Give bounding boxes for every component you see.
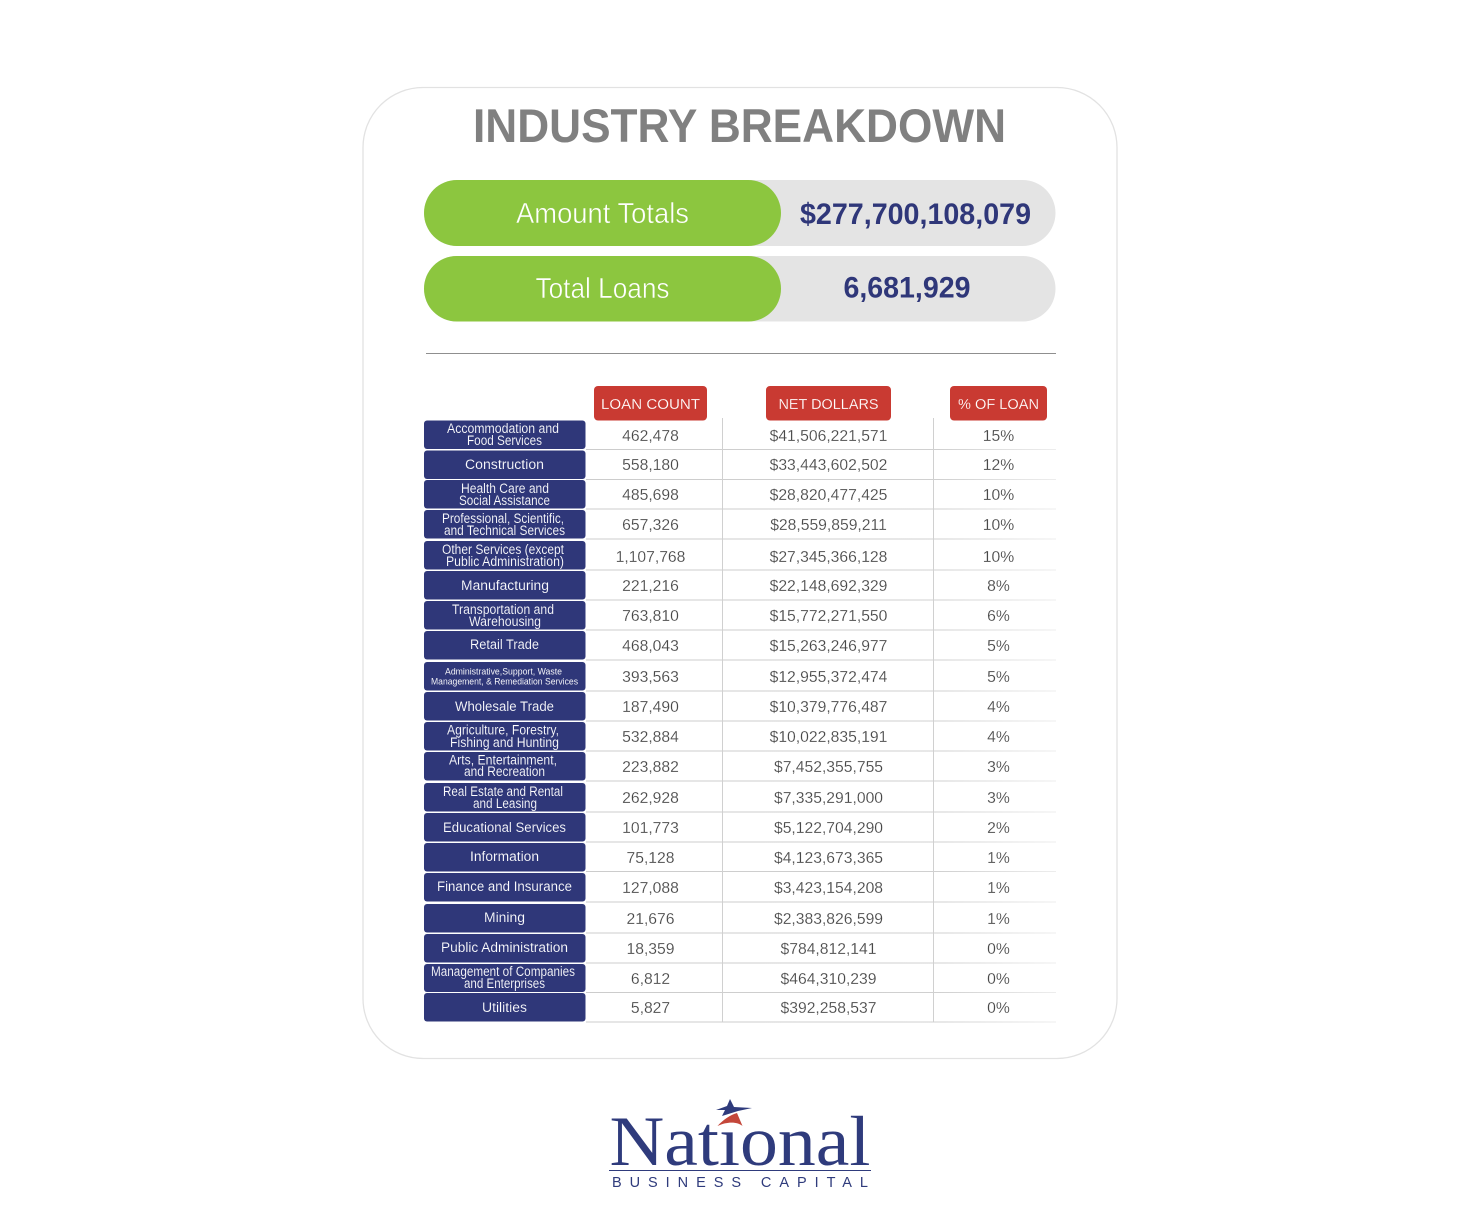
stat pill: amount totals: Amount Totals — [516, 198, 689, 230]
stat pill: total loans: Total Loans — [536, 273, 670, 305]
row: health care and social assistance: Health Care and — [461, 481, 549, 496]
row: educational services: 101,773 — [622, 820, 679, 837]
column header: net dollars: NET DOLLARS — [778, 396, 878, 413]
row: administrative and support services — [424, 662, 1010, 690]
row: health care and social assistance: Social Assistance — [459, 493, 550, 508]
row: utilities — [424, 993, 1010, 1022]
row: professional, scientific and technical services: and Technical Services — [444, 523, 565, 538]
row: wholesale trade: 4% — [987, 699, 1010, 716]
row: retail trade — [424, 631, 1010, 660]
row: agriculture, forestry, fishing and hunting: $10,022,835,191 — [770, 729, 887, 746]
row: mining — [424, 904, 1010, 932]
logo: National Business Capital: National — [610, 1103, 870, 1181]
row: finance and insurance — [424, 873, 1010, 902]
row: professional, scientific and technical services — [424, 510, 1014, 538]
row: retail trade: Retail Trade — [470, 637, 539, 652]
row: accommodation and food services: $41,506,221,571 — [770, 428, 887, 445]
row: transportation and warehousing: Transportation and — [452, 602, 554, 617]
row: agriculture, forestry, fishing and hunting: 4% — [987, 729, 1010, 746]
row: transportation and warehousing: $15,772,271,550 — [770, 608, 888, 625]
row: educational services: $5,122,704,290 — [774, 820, 883, 837]
stat pill: total loans — [424, 256, 1056, 322]
panel: card — [363, 88, 1117, 1058]
row: educational services: Educational Services — [443, 820, 566, 835]
row: professional, scientific and technical services: 657,326 — [622, 517, 679, 534]
row: retail trade: 468,043 — [622, 638, 679, 655]
row: real estate and rental and leasing: Real Estate and Rental — [443, 784, 563, 799]
row: utilities: 0% — [987, 1000, 1010, 1017]
row: finance and insurance: Finance and Insurance — [437, 879, 572, 894]
row: health care and social assistance: $28,820,477,425 — [770, 487, 888, 504]
column header: percent of loan: % OF LOAN — [958, 396, 1039, 413]
row: wholesale trade: 187,490 — [622, 699, 679, 716]
row: professional, scientific and technical services: Professional, Scientific, — [442, 511, 564, 526]
row: professional, scientific and technical services: $28,559,859,211 — [770, 517, 887, 534]
row: utilities: 5,827 — [631, 1000, 670, 1017]
row: information — [424, 843, 1010, 872]
row: public administration: 0% — [987, 941, 1010, 958]
row: arts, entertainment and recreation: 3% — [987, 759, 1010, 776]
column header: loan count — [594, 386, 707, 420]
row: professional, scientific and technical services: 10% — [983, 517, 1014, 534]
row: arts, entertainment and recreation — [424, 752, 1010, 780]
row: transportation and warehousing: 763,810 — [622, 608, 679, 625]
row: retail trade: 5% — [987, 638, 1010, 655]
row: educational services: 2% — [987, 820, 1010, 837]
row: transportation and warehousing — [424, 601, 1010, 630]
row: information: $4,123,673,365 — [774, 850, 883, 867]
row: other services: 1,107,768 — [616, 549, 686, 566]
stat pill: amount totals: $277,700,108,079 — [800, 198, 1031, 231]
row: other services: 10% — [983, 549, 1014, 566]
row: administrative and support services: 393,563 — [622, 669, 679, 686]
icon: star — [716, 1099, 752, 1128]
row: mining: 1% — [987, 911, 1010, 928]
row: real estate and rental and leasing — [424, 783, 1010, 812]
row: wholesale trade: $10,379,776,487 — [770, 699, 887, 716]
row: arts, entertainment and recreation: $7,452,355,755 — [774, 759, 883, 776]
stat pill: total loans: 6,681,929 — [844, 272, 970, 304]
row: manufacturing: 8% — [987, 578, 1010, 595]
row: administrative and support services: $12,955,372,474 — [770, 669, 888, 686]
row: administrative and support services: Management, & Remediation Services — [431, 676, 578, 688]
row: other services: Public Administration) — [446, 554, 564, 569]
row: information: 75,128 — [627, 850, 675, 867]
row: arts, entertainment and recreation: Arts, Entertainment, — [449, 752, 557, 768]
row: management of companies and enterprises: Management of Companies — [431, 964, 575, 979]
row: manufacturing — [424, 571, 1010, 600]
row: public administration — [424, 934, 1010, 962]
row: retail trade: $15,263,246,977 — [770, 638, 887, 655]
row: construction: $33,443,602,502 — [770, 457, 887, 474]
row: transportation and warehousing: 6% — [987, 608, 1010, 625]
row: administrative and support services: Administrative,Support, Waste — [445, 666, 562, 678]
row: utilities: $392,258,537 — [781, 1000, 876, 1017]
row: management of companies and enterprises: 0% — [987, 971, 1010, 988]
column header: loan count: LOAN COUNT — [601, 396, 700, 413]
row: construction: Construction — [465, 457, 544, 472]
row: transportation and warehousing: Warehousing — [469, 614, 541, 629]
row: utilities: Utilities — [482, 1000, 527, 1015]
row: mining: 21,676 — [627, 911, 675, 928]
row: manufacturing: $22,148,692,329 — [770, 578, 887, 595]
row: finance and insurance: $3,423,154,208 — [774, 880, 883, 897]
row: manufacturing: 221,216 — [622, 578, 679, 595]
row: construction: 558,180 — [622, 457, 679, 474]
row: real estate and rental and leasing: $7,335,291,000 — [774, 790, 883, 807]
row: accommodation and food services: 15% — [983, 428, 1014, 445]
row: other services — [424, 541, 1014, 570]
row: accommodation and food services — [424, 420, 1014, 449]
row: public administration: Public Administration — [441, 940, 568, 955]
row: accommodation and food services: 462,478 — [622, 428, 679, 445]
row: finance and insurance: 1% — [987, 880, 1010, 897]
row: wholesale trade: Wholesale Trade — [455, 699, 554, 714]
stat pill: amount totals — [424, 180, 1056, 246]
row: health care and social assistance — [424, 480, 1014, 508]
logo: National Business Capital: BUSINESS CAPITAL — [612, 1175, 868, 1191]
row: other services: $27,345,366,128 — [770, 549, 888, 566]
column header: percent of loan — [950, 386, 1047, 420]
row: public administration: $784,812,141 — [781, 941, 876, 958]
row: wholesale trade — [424, 692, 1010, 720]
row: agriculture, forestry, fishing and hunting — [424, 722, 1010, 750]
row: mining: Mining — [484, 910, 525, 925]
row: mining: $2,383,826,599 — [774, 911, 883, 928]
row: management of companies and enterprises: 6,812 — [631, 971, 670, 988]
row: health care and social assistance: 10% — [983, 487, 1014, 504]
row: public administration: 18,359 — [627, 941, 674, 958]
row: arts, entertainment and recreation: 223,882 — [622, 759, 679, 776]
row: information: 1% — [987, 850, 1010, 867]
row: real estate and rental and leasing: and Leasing — [473, 796, 537, 811]
row: agriculture, forestry, fishing and hunting: 532,884 — [622, 729, 679, 746]
row: educational services — [424, 813, 1010, 842]
row: other services: Other Services (except — [442, 542, 564, 557]
row: real estate and rental and leasing: 3% — [987, 790, 1010, 807]
data table — [424, 386, 1056, 1022]
row: construction: 12% — [983, 457, 1014, 474]
title: INDUSTRY BREAKDOWN — [473, 99, 1006, 152]
row: management of companies and enterprises: $464,310,239 — [781, 971, 876, 988]
row: administrative and support services: 5% — [987, 669, 1010, 686]
row: accommodation and food services: Food Services — [467, 433, 542, 448]
row: information: Information — [470, 849, 539, 864]
row: construction — [424, 450, 1014, 479]
row: agriculture, forestry, fishing and hunting: Agriculture, Forestry, — [447, 722, 559, 738]
row: arts, entertainment and recreation: and Recreation — [464, 764, 545, 779]
row: real estate and rental and leasing: 262,928 — [622, 790, 679, 807]
row: health care and social assistance: 485,698 — [622, 487, 679, 504]
column header: net dollars — [766, 386, 891, 420]
row: management of companies and enterprises: and Enterprises — [464, 976, 545, 991]
row: manufacturing: Manufacturing — [461, 578, 549, 593]
row: finance and insurance: 127,088 — [622, 880, 679, 897]
row: management of companies and enterprises — [424, 964, 1010, 992]
row: accommodation and food services: Accommodation and — [447, 421, 559, 436]
row: agriculture, forestry, fishing and hunting: Fishing and Hunting — [450, 735, 559, 750]
